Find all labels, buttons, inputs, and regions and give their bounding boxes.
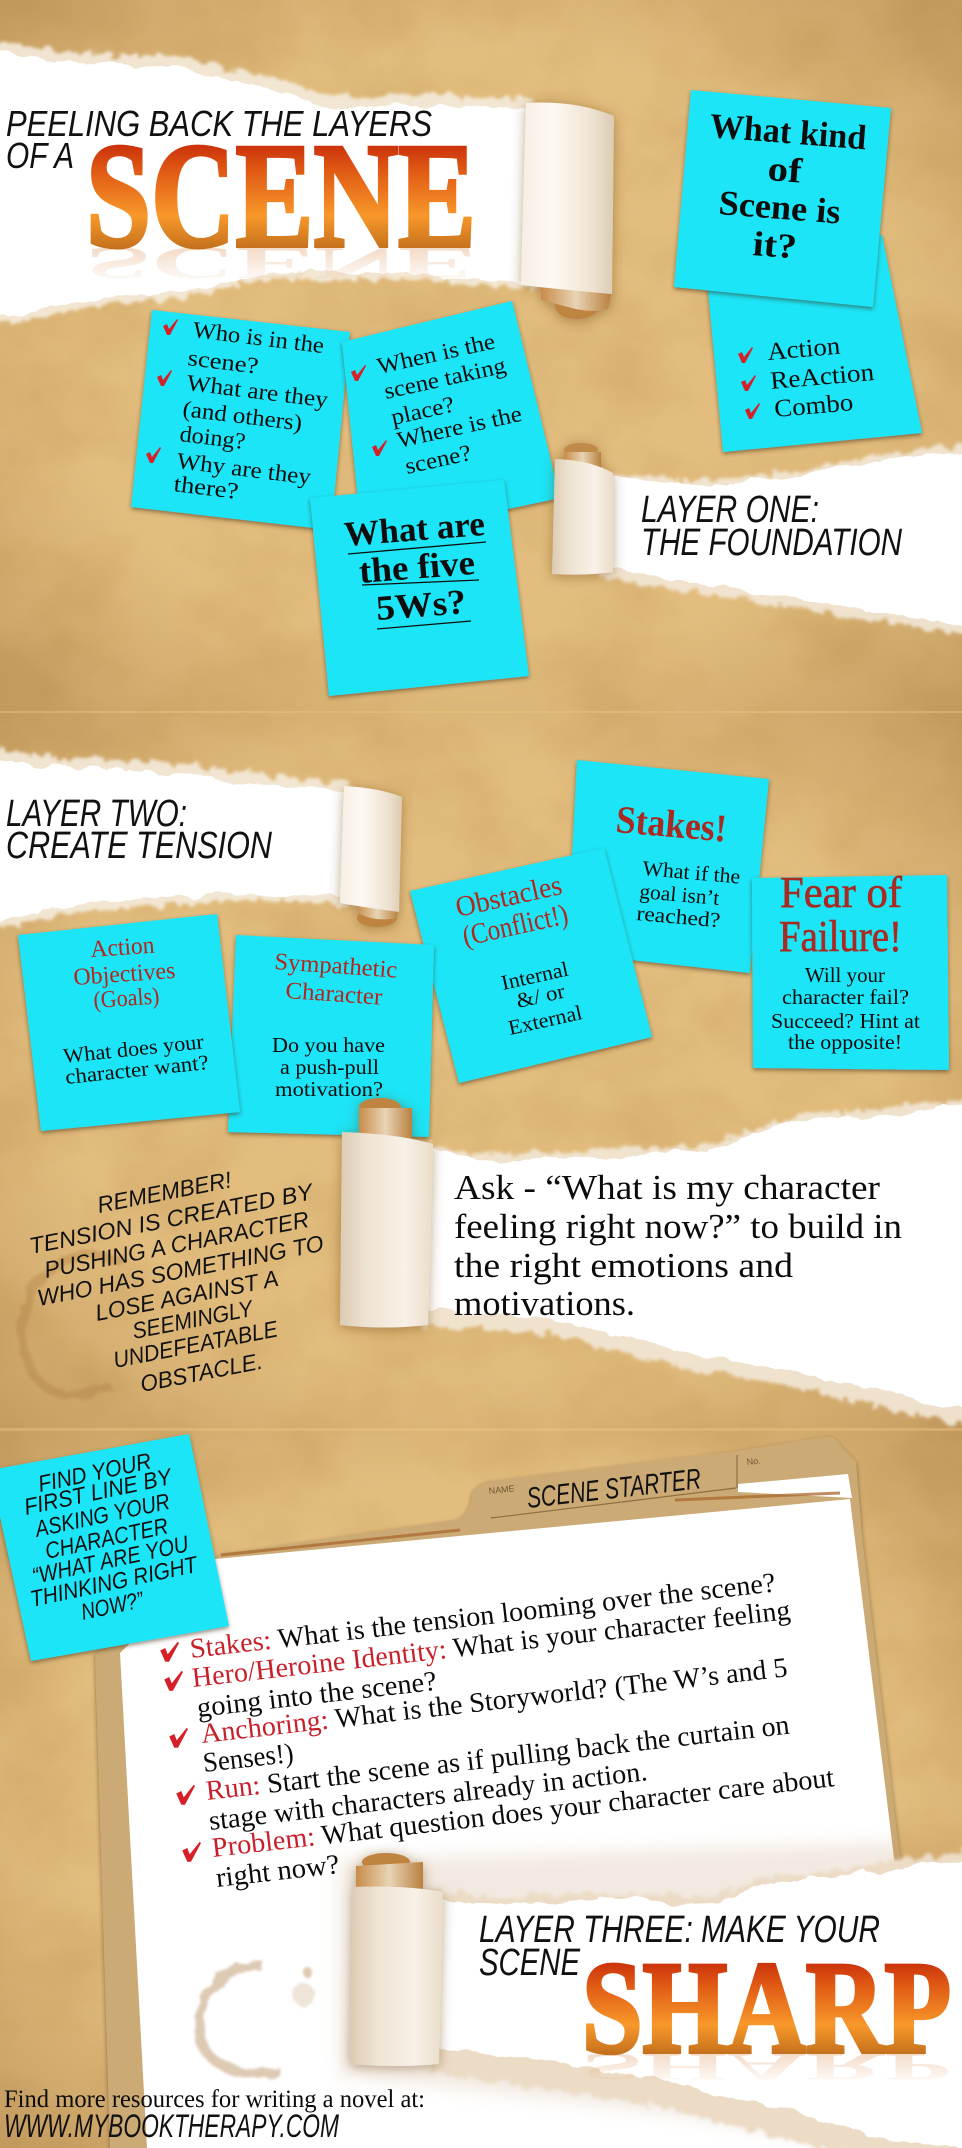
checklist: going into the scene? (195, 1666, 438, 1724)
note: obstacles: External (506, 1000, 584, 1040)
heading: layer three (479, 1909, 951, 2089)
ask text: motivations. (454, 1284, 635, 1323)
ask text: feeling right now?” to build in (454, 1207, 902, 1246)
roll: layer three (350, 1853, 443, 2066)
note: first line: CHARACTER (43, 1512, 170, 1564)
note: sympathetic character: motivation? (275, 1077, 383, 1101)
folder tab label: NAME (488, 1483, 515, 1496)
footer credit: WWW.MYBOOKTHERAPY.COM (4, 2108, 339, 2144)
note: what kind of scene list: Action (766, 333, 842, 366)
note: first line (0, 1434, 229, 1661)
note: first line: FIRST LINE BY (22, 1463, 175, 1520)
note: obstacles: Internal (499, 957, 571, 995)
checklist: stage with characters already in action. (207, 1756, 649, 1837)
folder (95, 1437, 962, 2148)
checklist: Anchoring: What is the Storyworld? (The W’s and 5 (199, 1652, 789, 1750)
note: who what why: scene? (186, 345, 260, 379)
note: stakes: goal isn’t (639, 879, 721, 910)
heading: layer two (6, 793, 272, 867)
note: who what why: Why are they (175, 448, 313, 489)
checklist: Stakes: What is the tension looming over the scene? (188, 1567, 777, 1665)
note: stakes: Stakes! (614, 798, 729, 851)
note: stakes: reached? (636, 901, 721, 932)
note: obstacles: Obstacles (453, 869, 565, 924)
note: action objectives (18, 914, 240, 1131)
note: first line: NOW?” (79, 1586, 147, 1625)
coffee stain (22, 1255, 125, 1395)
note: fear of failure: character fail? (782, 985, 909, 1009)
note: first line: “WHAT ARE YOU (30, 1530, 191, 1589)
torn strip: title (0, 38, 614, 323)
remember note: PUSHING A CHARACTER (42, 1206, 311, 1283)
ask text (454, 1168, 902, 1323)
roll: layer one (552, 443, 613, 575)
note: first line: THINKING RIGHT (28, 1551, 201, 1612)
note: what kind of scene list: ReAction (769, 359, 876, 395)
note: what kind of scene heading: Scene is (717, 183, 842, 232)
SCENE wordmark: SCENE (86, 113, 476, 279)
folder tab label: No. (746, 1456, 761, 1467)
roll: ask callout (340, 1098, 433, 1328)
note: when where: place? (389, 392, 457, 430)
note: fear of failure: the opposite! (788, 1030, 902, 1054)
note: action objectives: character want? (64, 1050, 210, 1089)
torn strip: layer one (552, 441, 962, 636)
note: obstacles: (Conflict!) (460, 898, 571, 953)
note: fear of failure: Will your (805, 963, 885, 987)
checklist: Problem: What question does your character care about (210, 1762, 836, 1864)
ask text: Ask - “What is my character (454, 1168, 880, 1207)
remember note: WHO HAS SOMETHING TO (35, 1230, 326, 1311)
note: action objectives: Objectives (73, 958, 176, 991)
ask text: the right emotions and (454, 1246, 794, 1285)
note: first line: ASKING YOUR (31, 1488, 172, 1542)
note: five 5Ws: the five (358, 543, 476, 591)
checklist (160, 1567, 836, 1894)
remember note: UNDEFEATABLE (111, 1315, 280, 1373)
heading: layer three: SCENE (479, 1942, 581, 1984)
note: what kind of scene heading: it? (751, 224, 798, 266)
remember note: OBSTACLE. (138, 1348, 265, 1397)
torn strip: layer two (0, 742, 402, 930)
torn strip: ask callout (340, 1097, 962, 1430)
note: action objectives: What does your (62, 1029, 205, 1068)
heading: layer two: LAYER TWO: (6, 793, 187, 835)
remember note: REMEMBER! (95, 1166, 234, 1218)
note: what kind of scene list (705, 235, 922, 452)
checklist: Run: Start the scene as if pulling back the curtain on (204, 1710, 791, 1807)
folder tab label: SCENE STARTER (525, 1463, 703, 1515)
note: first line: FIND YOUR (36, 1448, 154, 1497)
note: who what why: there? (172, 471, 240, 504)
note: who what why (131, 310, 350, 530)
note: fear of failure (752, 868, 949, 1070)
note: action objectives: Action (90, 933, 155, 963)
note: when where (342, 301, 560, 540)
note: who what why: Who is in the (191, 317, 325, 358)
note: when where: When is the (375, 329, 497, 379)
note: five 5Ws: What are (343, 504, 486, 554)
remember note (27, 1166, 326, 1397)
SCENE wordmark: SCENE (86, 238, 476, 288)
footer credit (4, 2086, 425, 2144)
note: when where: scene taking (382, 353, 509, 404)
checklist: Hero/Heroine Identity: What is your character feeling (190, 1595, 792, 1694)
note: action objectives: (Goals) (93, 983, 160, 1014)
note: obstacles (410, 848, 652, 1083)
remember note: LOSE AGAINST A (93, 1265, 281, 1326)
note: stakes (567, 760, 769, 973)
note: fear of failure: Failure! (779, 912, 902, 961)
heading: layer two: CREATE TENSION (6, 825, 272, 867)
note: what kind of scene heading: of (766, 149, 804, 191)
checklist: right now? (214, 1849, 341, 1894)
remember note: TENSION IS CREATED BY (27, 1178, 316, 1259)
note: stakes: What if the (642, 856, 741, 889)
title text: PEELING BACK THE LAYERS (6, 103, 432, 144)
torn strip: layer three (340, 1840, 962, 2148)
roll: title (521, 103, 614, 319)
note: five 5Ws (310, 480, 529, 696)
remember note: SEEMINGLY (130, 1295, 256, 1344)
note: when where: Where is the (395, 401, 524, 453)
note: who what why: (and others) (181, 396, 304, 436)
note: sympathetic character: Sympathetic (274, 949, 398, 984)
note: sympathetic character (228, 935, 434, 1137)
note: sympathetic character: a push-pull (280, 1055, 379, 1079)
title text: OF A (6, 135, 74, 176)
heading: layer one (641, 489, 902, 564)
roll: layer two (340, 786, 402, 927)
footer credit: Find more resources for writing a novel at: (4, 2086, 425, 2113)
note: what kind of scene heading: What kind (708, 106, 868, 157)
title text (6, 103, 476, 288)
note: fear of failure: Succeed? Hint at (771, 1009, 920, 1033)
coffee stain: folder (199, 1966, 315, 2074)
note: obstacles: &/ or (514, 979, 567, 1013)
heading: layer one: LAYER ONE: (641, 489, 819, 531)
checklist: Senses!) (201, 1738, 295, 1779)
note: what kind of scene list: Combo (773, 389, 854, 423)
folder paper (120, 1499, 926, 2148)
note: when where: scene? (403, 440, 473, 479)
note: who what why: doing? (178, 421, 247, 454)
note: fear of failure: Fear of (780, 868, 902, 917)
note: who what why: What are they (185, 370, 330, 412)
note: five 5Ws: 5Ws? (375, 582, 467, 628)
note: sympathetic character: Do you have (272, 1033, 385, 1057)
note: what kind of scene heading (674, 90, 891, 307)
note: sympathetic character: Character (285, 978, 383, 1011)
